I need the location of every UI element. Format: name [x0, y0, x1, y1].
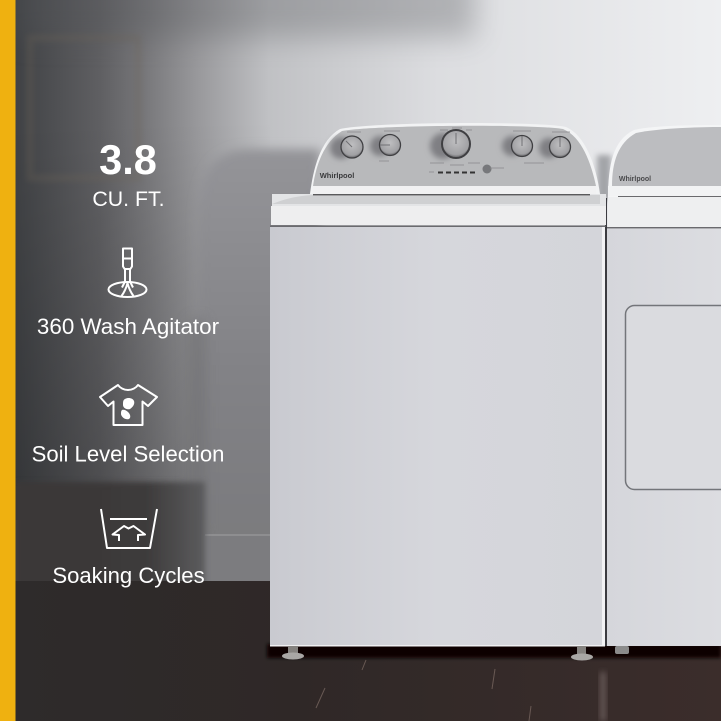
capacity unit: CU. FT.: [92, 187, 165, 211]
cycle indicator lights: [438, 172, 475, 174]
feature: soaking cycles: [52, 509, 205, 588]
small console labels: [347, 128, 570, 172]
washer lid: [270, 194, 606, 227]
capacity value: 3.8: [99, 136, 157, 183]
yellow accent bar: [0, 0, 16, 721]
dryer brand label: Whirlpool: [619, 176, 651, 183]
washer brand label: Whirlpool: [320, 171, 354, 180]
console shadows: [330, 133, 559, 159]
feature: 360 wash agitator: [37, 248, 220, 339]
feature: soil level selection: [32, 385, 224, 466]
feature: capacity: [92, 136, 165, 211]
washer feet: [282, 646, 593, 660]
washer: white top-load machine: [270, 123, 607, 660]
label: Soil Level Selection: [32, 442, 224, 466]
label: 360 Wash Agitator: [37, 314, 220, 339]
icon: agitator: [108, 248, 146, 297]
washer cabinet: [270, 198, 607, 646]
icon: stained t-shirt: [100, 385, 157, 425]
icon: soak tub: [101, 509, 157, 548]
dryer: neighbouring appliance: [607, 125, 721, 654]
knobs: [341, 130, 570, 158]
background: dark wood floor: [15, 482, 721, 721]
label: Soaking Cycles: [52, 563, 205, 588]
washer control console: [310, 123, 600, 194]
